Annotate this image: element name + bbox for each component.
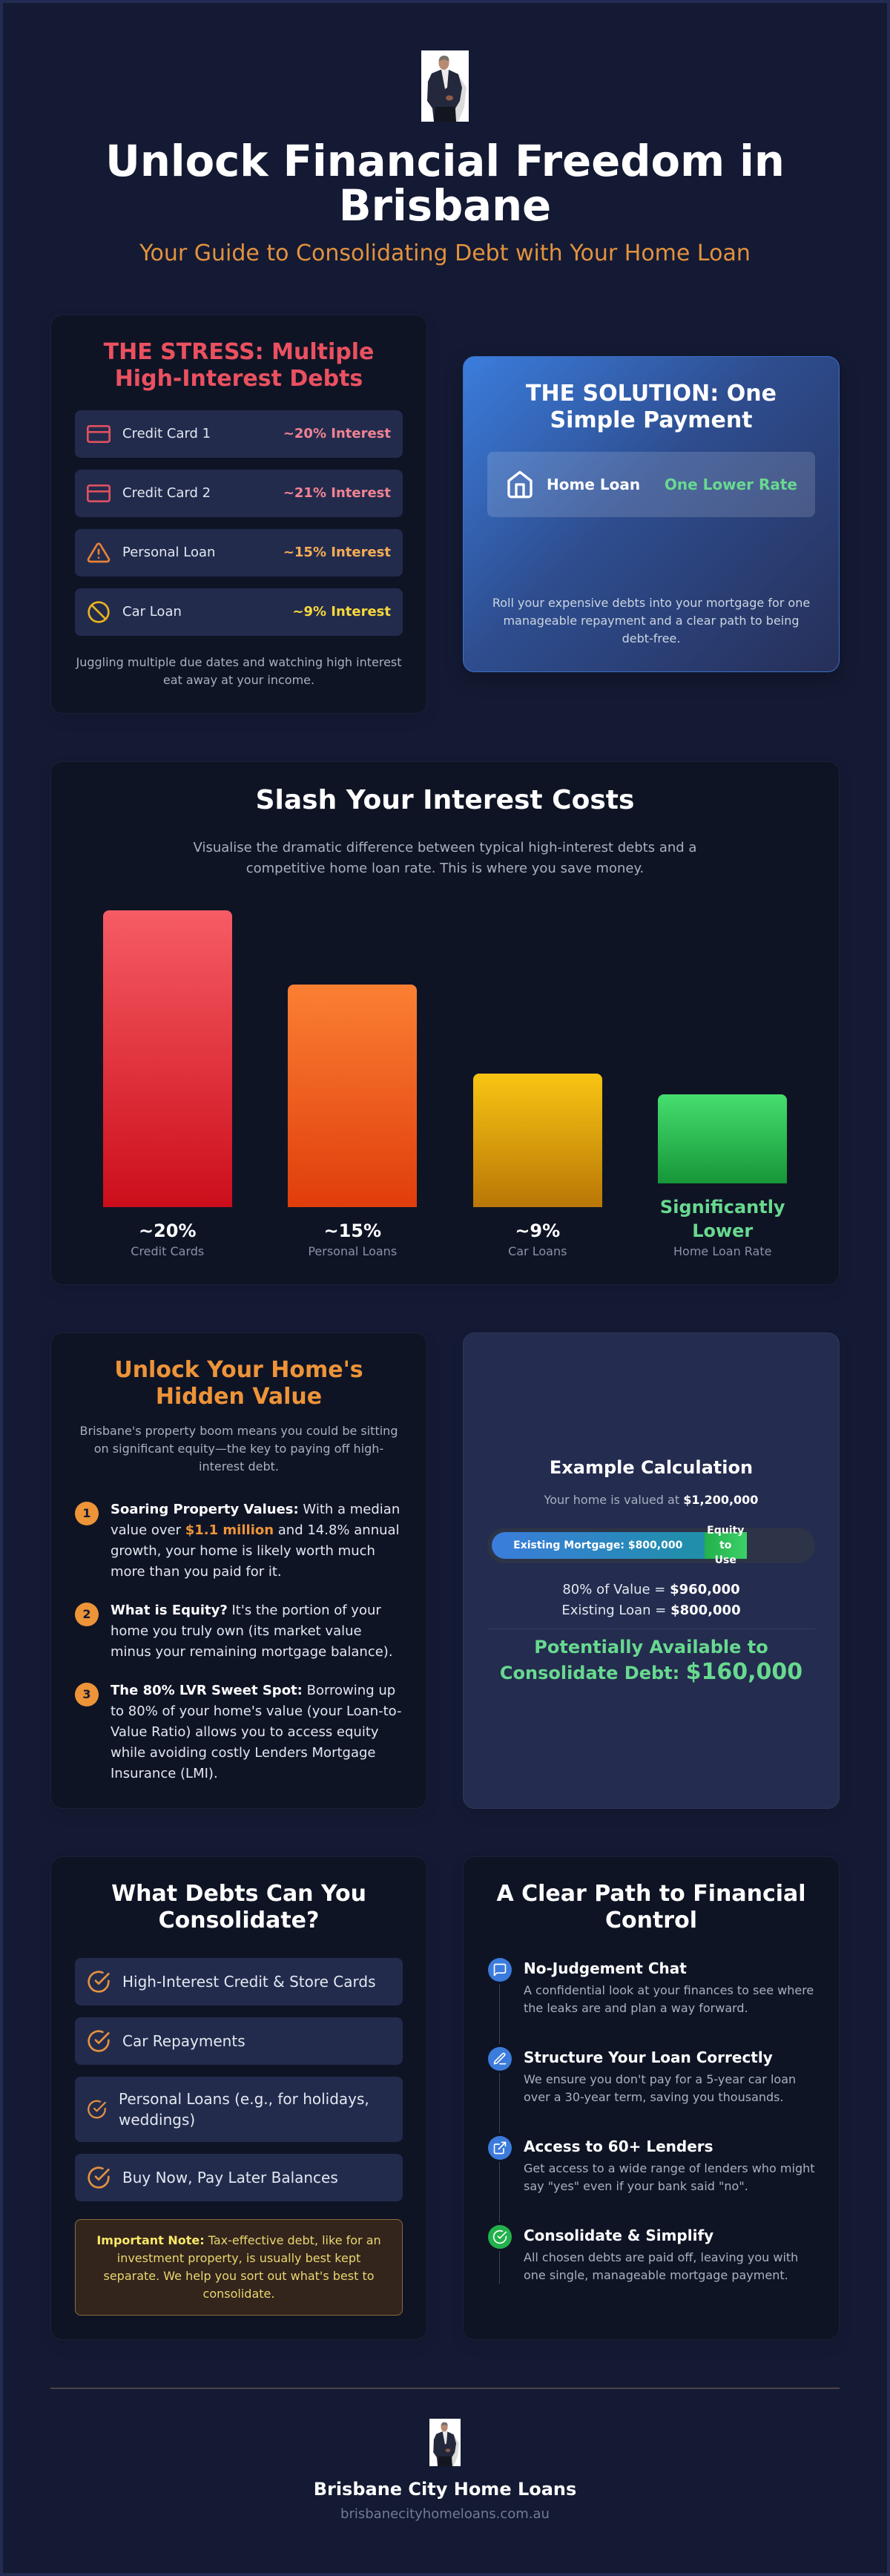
heading: What Debts Can You Consolidate? <box>111 1881 366 1933</box>
number badge <box>75 1502 99 1525</box>
logo photo: man in suit <box>421 50 469 122</box>
icon: warning triangle <box>88 543 110 562</box>
value: ~9% <box>515 1220 560 1241</box>
existing mortgage segment <box>492 1532 705 1559</box>
label: Personal Loans (e.g., for holidays, weddings) <box>119 2090 369 2129</box>
panel: the solution <box>463 356 840 672</box>
label: Car Repayments <box>122 2032 245 2050</box>
subtitle: Your Guide to Consolidating Debt with Your Home Loan <box>139 240 751 266</box>
rate: ~20% Interest <box>283 426 391 441</box>
value: ~20% <box>139 1220 197 1241</box>
icon: check <box>88 1971 110 1993</box>
header <box>105 50 785 266</box>
label: Home Loan <box>547 476 640 493</box>
item: personal loans <box>75 2077 403 2142</box>
icon: check <box>88 2030 110 2052</box>
result: Potentially Available to Consolidate Debt: $160,000 <box>500 1637 802 1685</box>
label: Credit Card 2 <box>122 485 211 501</box>
calculation lines <box>561 1582 741 1618</box>
line: existing loan: Existing Loan = $800,000 <box>561 1603 741 1618</box>
panel: clear path <box>463 1856 840 2340</box>
bar <box>288 985 417 1207</box>
equity bar <box>487 1528 815 1563</box>
website: brisbanecityhomeloans.com.au <box>340 2506 550 2522</box>
label: Credit Card 1 <box>122 426 211 441</box>
step title: Consolidate & Simplify <box>524 2227 713 2244</box>
important note <box>75 2219 403 2316</box>
icon: credit card <box>87 425 111 443</box>
heading: Example Calculation <box>550 1457 753 1478</box>
rate: ~21% Interest <box>283 485 391 501</box>
step 4 <box>487 2225 815 2314</box>
text: The 80% LVR Sweet Spot: Borrowing up to 80% of your home's value (your Loan-to-Value Ratio) allows you to access equity while avoiding costly Lenders Mortgage Insurance (LMI). <box>111 1683 402 1781</box>
number badge: 1 <box>82 1506 91 1520</box>
bar <box>658 1094 787 1183</box>
icon: home <box>507 470 533 499</box>
bar chart <box>103 910 787 1258</box>
panel: example calculation <box>463 1333 840 1809</box>
footer logo photo <box>429 2419 461 2466</box>
panel: hidden value <box>50 1333 427 1809</box>
point 3 <box>75 1683 402 1781</box>
column: personal loans <box>288 985 417 1258</box>
equity segment <box>705 1532 747 1559</box>
number badge <box>75 1683 99 1706</box>
step 2 <box>487 2047 815 2136</box>
step text: All chosen debts are paid off, leaving you with one single, manageable mortgage payment. <box>524 2250 798 2282</box>
intro: Brisbane's property boom means you could be sitting on significant equity—the key to paying off high-interest debt. <box>80 1424 398 1473</box>
line: 80% of value: 80% of Value = $960,000 <box>562 1582 740 1597</box>
icon: external link <box>488 2136 512 2160</box>
item: credit cards <box>75 1958 403 2005</box>
item: car repayments <box>75 2017 403 2065</box>
rate: ~9% Interest <box>292 604 391 620</box>
footer <box>50 2388 840 2536</box>
equity segment: Equity to Use <box>707 1525 744 1566</box>
column: home loan rate <box>658 1094 787 1258</box>
chart description: Visualise the dramatic difference between typical high-interest debts and a competitive home loan rate. This is where you save money. <box>194 840 696 876</box>
item: buy now pay later <box>75 2154 403 2201</box>
text: What is Equity? It's the portion of your home you truly own (its market value minus your remaining mortgage balance). <box>111 1603 393 1660</box>
debt row: car loan <box>75 588 403 636</box>
company name: Brisbane City Home Loans <box>314 2479 576 2500</box>
rate: ~15% Interest <box>283 545 391 560</box>
heading: A Clear Path to Financial Control <box>496 1881 806 1933</box>
number badge: 3 <box>82 1687 91 1701</box>
icon: chat <box>488 1958 512 1982</box>
important note: Important Note: Tax-effective debt, like for an investment property, is usually best kept separate. We help you sort out what's best to consolidate. <box>96 2233 381 2301</box>
step title: No-Judgement Chat <box>524 1959 687 1977</box>
caption: Credit Cards <box>131 1244 204 1258</box>
step title: Access to 60+ Lenders <box>524 2138 713 2155</box>
label: Car Loan <box>122 604 182 620</box>
number badge <box>75 1603 99 1626</box>
heading: Slash Your Interest Costs <box>256 785 634 815</box>
icon: check <box>488 2225 512 2249</box>
bar <box>103 910 232 1207</box>
panel: the stress <box>50 315 427 714</box>
stress note: Juggling multiple due dates and watching high interest eat away at your income. <box>76 655 402 687</box>
heading: Unlock Your Home's Hidden Value <box>114 1357 363 1410</box>
label: Personal Loan <box>122 545 215 560</box>
step text: A confidential look at your finances to see where the leaks are and plan a way forward. <box>524 1983 814 2015</box>
rate: One Lower Rate <box>665 476 797 493</box>
step 3 <box>487 2136 815 2225</box>
icon: slash circle <box>88 601 110 623</box>
point 1 <box>75 1502 400 1580</box>
home value: Your home is valued at $1,200,000 <box>544 1493 758 1507</box>
step 1 <box>487 1958 815 2047</box>
debt row: credit card 2 <box>75 470 403 517</box>
step title: Structure Your Loan Correctly <box>524 2048 773 2066</box>
panel: what debts can you consolidate <box>50 1856 427 2340</box>
step text: Get access to a wide range of lenders who might say "yes" even if your bank said "no". <box>524 2161 815 2193</box>
caption: Home Loan Rate <box>673 1244 771 1258</box>
title: Unlock Financial Freedom in Brisbane <box>105 137 785 231</box>
caption: Car Loans <box>508 1244 567 1258</box>
icon: credit card <box>87 484 111 502</box>
caption: Personal Loans <box>308 1244 397 1258</box>
label: High-Interest Credit & Store Cards <box>122 1973 375 1991</box>
debt row: credit card 1 <box>75 410 403 458</box>
column: credit cards <box>103 910 232 1258</box>
icon: check <box>88 2166 110 2189</box>
existing mortgage segment: Existing Mortgage: $800,000 <box>513 1540 682 1551</box>
value: Significantly Lower <box>660 1197 785 1241</box>
step text: We ensure you don't pay for a 5-year car loan over a 30-year term, saving you thousands. <box>524 2072 796 2104</box>
bar <box>473 1074 602 1207</box>
panel: interest chart <box>50 761 840 1285</box>
debt row: personal loan <box>75 529 403 576</box>
icon: pen <box>488 2047 512 2071</box>
icon: check <box>88 2100 106 2119</box>
value: ~15% <box>323 1220 381 1241</box>
text: Soaring Property Values: With a median value over $1.1 million and 14.8% annual growth, your home is likely worth much more than you paid for it. <box>111 1502 400 1580</box>
point 2 <box>75 1603 393 1660</box>
label: Buy Now, Pay Later Balances <box>122 2169 338 2186</box>
heading: the stress: THE STRESS: Multiple High-Interest Debts <box>104 339 374 392</box>
solution note: Roll your expensive debts into your mortgage for one manageable repayment and a clear path to being debt-free. <box>492 596 810 645</box>
column: car loans <box>473 1074 602 1258</box>
home loan row <box>487 452 815 517</box>
number badge: 2 <box>82 1607 91 1621</box>
heading: the solution: THE SOLUTION: One Simple Payment <box>526 381 777 433</box>
